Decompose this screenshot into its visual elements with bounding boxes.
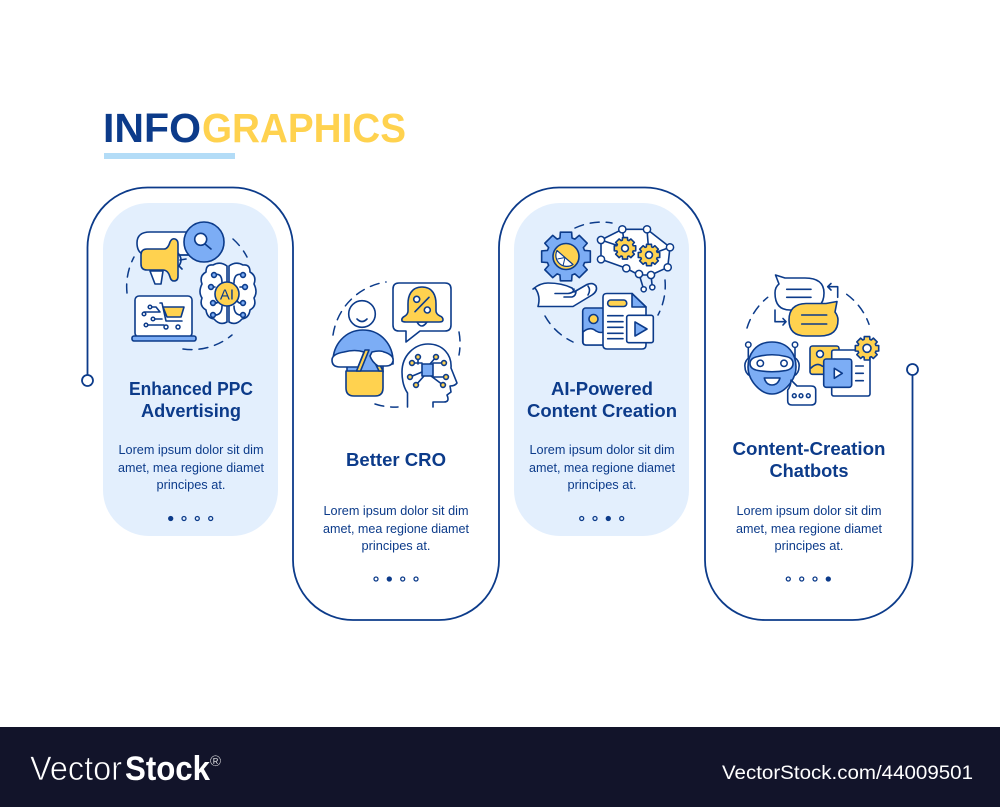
footer bar: VectorStock.com/44009501 [722,763,973,784]
panel background: third card [514,203,689,536]
text block: card 2: principes at. [362,539,430,553]
panel background: first card [103,203,278,536]
text block: card 4: amet, mea regione diamet [736,522,883,536]
pagination dots: card 1 [169,516,213,520]
pagination dots: card 4 [786,577,830,581]
icon: content creation chatbots [745,275,879,405]
text block: card 4: Lorem ipsum dolor sit dim [736,504,882,518]
text block: card 2: amet, mea regione diamet [323,522,470,536]
text block: card 4: principes at. [774,539,844,553]
footer bar [0,727,1000,807]
text block: card 3: principes at. [568,478,636,492]
text block: card 3 [529,443,676,492]
title underline [104,153,235,159]
icon: PPC advertising: AI [220,286,234,304]
heading: Enhanced PPC Advertising [129,379,253,421]
title: GRAPHICS [202,105,406,151]
text block: card 1: principes at. [156,478,226,492]
text block: card 2 [323,504,470,553]
pagination dots: card 2 [374,577,418,581]
footer bar: Vector [30,750,122,788]
heading: Content-Creation Chatbots: Chatbots [770,461,848,481]
text block: card 4 [736,504,883,553]
heading: Content-Creation Chatbots [732,439,886,481]
heading: AI-Powered Content Creation [527,379,677,421]
heading: Enhanced PPC Advertising: Enhanced PPC [129,379,253,399]
footer bar: ® [210,753,221,770]
heading: Enhanced PPC Advertising: Advertising [141,401,241,421]
icon: AI content creation [533,222,674,349]
icon: PPC advertising [127,222,256,350]
heading: Better CRO: Better CRO [346,450,446,470]
heading: Content-Creation Chatbots: Content-Creation [732,439,886,459]
text block: card 1: Lorem ipsum dolor sit dim [118,443,264,457]
pagination dots: card 3 [580,516,624,520]
heading: AI-Powered Content Creation: AI-Powered [551,379,653,399]
text block: card 2: Lorem ipsum dolor sit dim [324,504,468,518]
text block: card 3: Lorem ipsum dolor sit dim [530,443,674,457]
title: INFO [103,105,201,151]
text block: card 1 [118,443,265,492]
text block: card 3: amet, mea regione diamet [529,461,676,475]
heading: AI-Powered Content Creation: Content Creation [527,401,677,421]
title [103,105,406,151]
icon: better CRO [332,282,460,407]
connecting outline [82,188,918,620]
text block: card 1: amet, mea regione diamet [118,461,265,475]
footer bar: Stock [125,750,210,788]
